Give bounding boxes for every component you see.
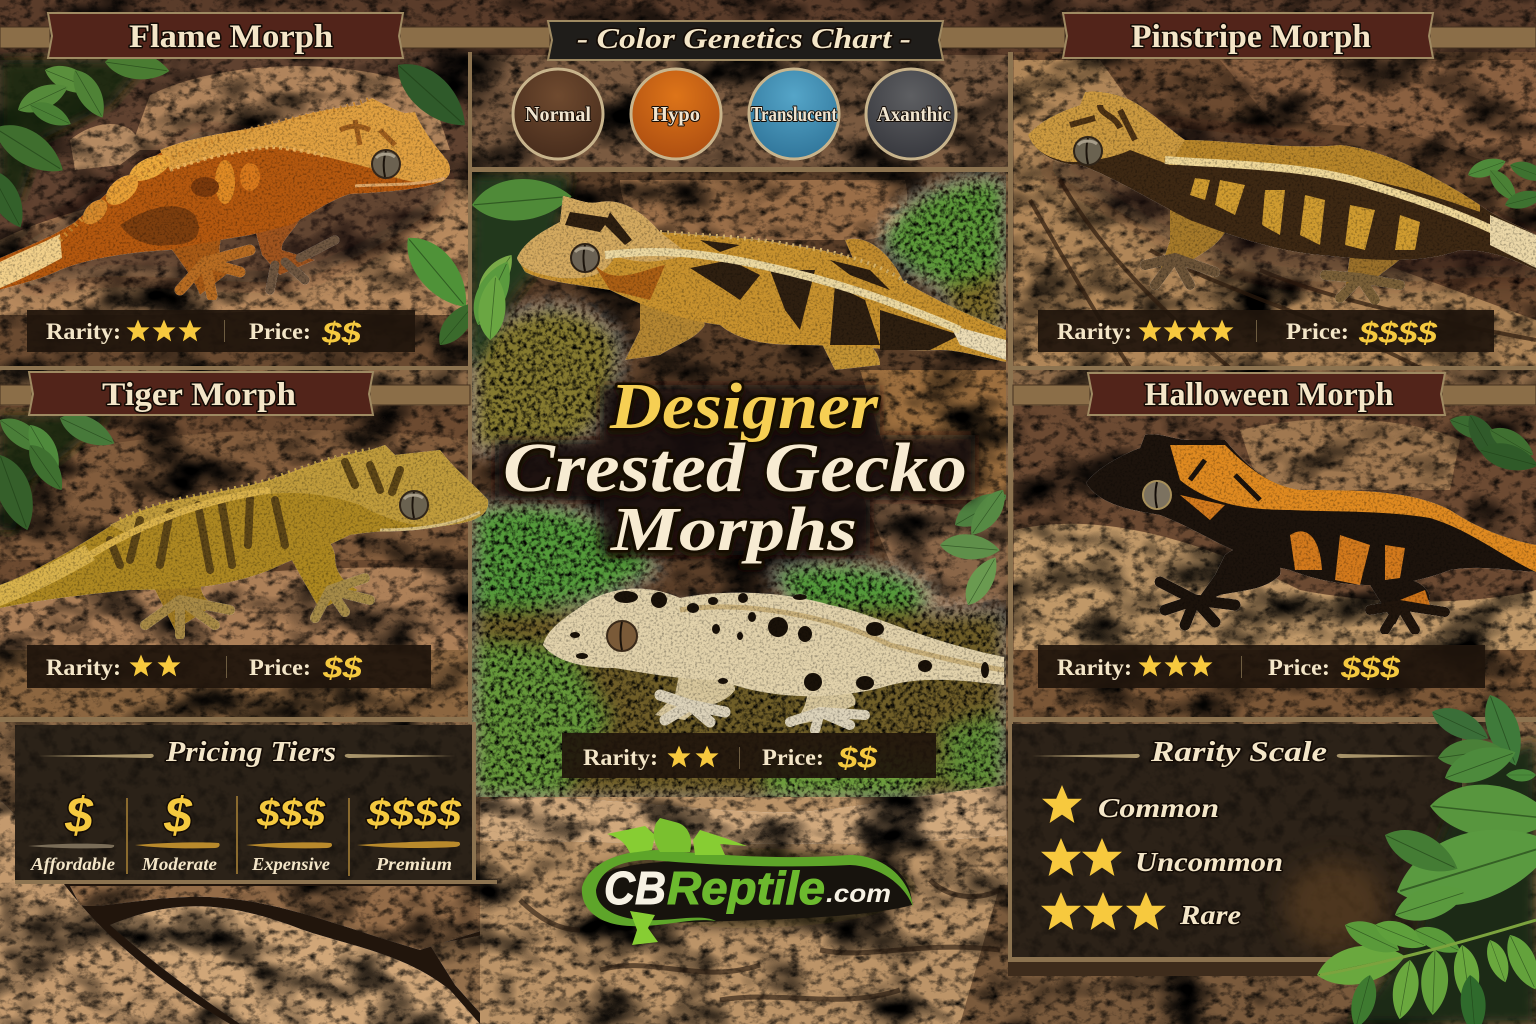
chip: Normal xyxy=(513,69,603,159)
tier: Affordable: $ xyxy=(64,787,94,843)
leaves: halloween panel xyxy=(1450,415,1536,470)
logo: CBReptile.com: Reptile xyxy=(667,862,825,914)
tier: Moderate: $ xyxy=(163,787,193,843)
tier: Affordable: Affordable xyxy=(30,854,115,874)
heading: Pricing Tiers: Pricing Tiers xyxy=(165,737,336,768)
title: Morphs xyxy=(610,496,857,564)
wood strips xyxy=(0,27,1536,405)
logo geckos xyxy=(607,818,747,945)
row: Uncommon: Uncommon xyxy=(1135,847,1283,877)
shadow under pinstripe gecko xyxy=(1040,120,1536,283)
chip: Axanthic: Axanthic xyxy=(877,102,951,126)
leaves: pinstripe panel xyxy=(1468,158,1536,209)
stat bar: center xyxy=(562,733,936,778)
title xyxy=(503,370,967,564)
chip: Translucent: Translucent xyxy=(751,102,837,126)
stat bar: center: Rarity: xyxy=(583,745,658,770)
logo text: CB xyxy=(604,862,666,914)
stat bar: Flame: Rarity: xyxy=(46,319,121,344)
tier: Expensive: Expensive xyxy=(251,854,330,874)
row: Rare xyxy=(1041,892,1241,930)
logo swoosh xyxy=(582,850,913,926)
tier: Expensive: $$$ xyxy=(256,793,326,835)
stat bar: Halloween xyxy=(1038,645,1485,688)
chip: Axanthic xyxy=(866,69,956,159)
stat bar: Flame xyxy=(27,310,415,352)
stat bar: center: $$ xyxy=(837,742,877,775)
gecko: flame xyxy=(0,98,450,296)
stat bar: Pinstripe: $$$$ xyxy=(1358,317,1437,350)
chip: Translucent xyxy=(749,69,839,159)
panel: Halloween Morph photo xyxy=(1014,406,1536,720)
rust patch on plaque xyxy=(1285,860,1385,950)
stat bar: Halloween: Rarity: xyxy=(1057,655,1132,680)
leaves: top left xyxy=(0,48,484,352)
genetics chart circles xyxy=(513,69,956,159)
banner: Halloween Morph xyxy=(1088,373,1445,415)
logo: CBReptile.com: .com xyxy=(826,880,891,908)
tier: Premium: Premium xyxy=(375,854,452,874)
leaves: center panel xyxy=(464,175,1013,610)
chip: Hypo: Hypo xyxy=(652,102,700,126)
title: Designer xyxy=(609,370,879,443)
center log xyxy=(480,785,1006,844)
tiger eye xyxy=(400,491,428,519)
panel: Rarity Scale xyxy=(1008,722,1462,976)
stat bar: Pinstripe xyxy=(1038,310,1494,352)
stat bar: Pinstripe: Price: xyxy=(1286,319,1349,344)
gecko: center spotted xyxy=(543,588,1004,730)
text: Color Genetics Chart: - Color Genetics Chart - xyxy=(577,24,911,55)
banner: Color Genetics Chart xyxy=(548,21,943,60)
plant: bottom right foliage xyxy=(1313,689,1536,1024)
tier: Moderate xyxy=(135,787,220,874)
gecko: halloween xyxy=(1086,434,1536,630)
banner: Flame Morph xyxy=(48,13,403,58)
text: Pinstripe Morph: Pinstripe Morph xyxy=(1131,19,1371,55)
tier: Premium xyxy=(357,793,462,874)
text: Flame Morph: Flame Morph xyxy=(129,19,333,55)
frame lines xyxy=(0,52,1536,724)
panel: Tiger Morph photo xyxy=(0,406,468,650)
chip: Normal: Normal xyxy=(525,102,591,126)
stat bar: Tiger: Price: xyxy=(249,655,311,680)
heading: Rarity Scale: Rarity Scale xyxy=(1150,737,1327,768)
gecko: tiger xyxy=(0,445,488,635)
stat bar: center: Price: xyxy=(762,745,824,770)
text: Tiger Morph: Tiger Morph xyxy=(102,377,296,413)
tier: Expensive xyxy=(246,793,332,874)
row: Uncommon xyxy=(1041,838,1283,877)
bottom logs xyxy=(0,785,1016,1024)
panel: Pinstripe Morph photo xyxy=(1014,52,1536,368)
panel: center photo xyxy=(464,172,1013,800)
panel: Flame Morph photo xyxy=(0,48,484,370)
stat bar: Tiger xyxy=(27,645,431,688)
tier: Affordable xyxy=(28,787,115,874)
stat bar: Flame: $$ xyxy=(321,317,361,350)
banner: Tiger Morph xyxy=(29,372,373,415)
title: Crested Gecko xyxy=(503,430,967,507)
row: Common: Common xyxy=(1098,793,1219,823)
gecko: center dark gold xyxy=(517,196,1006,370)
stat bar: Pinstripe: Rarity: xyxy=(1057,319,1132,344)
dark title haze xyxy=(495,385,975,555)
stat bar: Tiger: Rarity: xyxy=(46,655,121,680)
banner: Pinstripe Morph xyxy=(1063,13,1433,58)
logo: CBReptile.com xyxy=(580,818,916,945)
stat bar: Tiger: $$ xyxy=(322,652,362,685)
row: Rare: Rare xyxy=(1179,900,1241,930)
logo shadow xyxy=(580,848,916,928)
panel: Pricing Tiers xyxy=(15,722,497,884)
stat bar: Halloween: Price: xyxy=(1268,655,1330,680)
row: Common xyxy=(1042,785,1219,823)
stat bar: Halloween: $$$ xyxy=(1340,652,1400,685)
text: Halloween Morph: Halloween Morph xyxy=(1144,377,1394,413)
leaves: tiger panel xyxy=(0,406,120,536)
logo dark body xyxy=(588,859,912,923)
wood ledge xyxy=(1008,962,1368,976)
stat bar: Flame: Price: xyxy=(249,319,311,344)
tier: Moderate: Moderate xyxy=(141,854,217,874)
shadow under gecko xyxy=(20,130,450,290)
chip: Hypo xyxy=(631,69,721,159)
tier: Premium: $$$$ xyxy=(366,793,462,835)
gecko: pinstripe xyxy=(1028,92,1536,300)
